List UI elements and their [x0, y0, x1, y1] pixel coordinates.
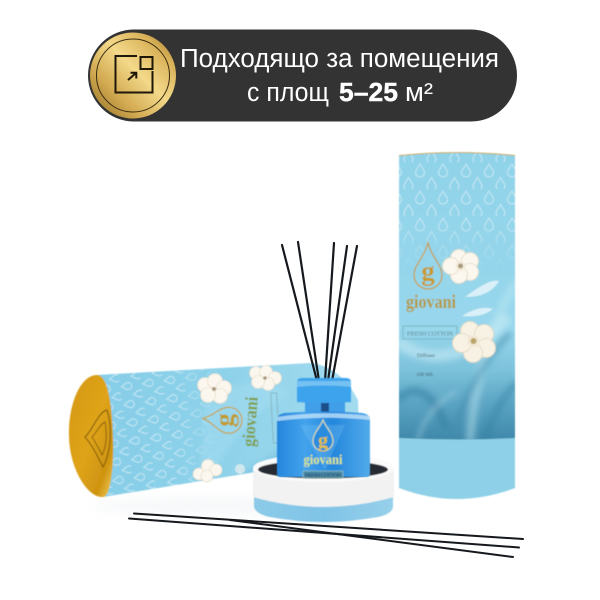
cotton flower bottom — [452, 322, 496, 362]
lid base — [253, 454, 394, 522]
bottle cap — [297, 378, 351, 403]
header badge — [88, 30, 517, 122]
gold medallion icon — [90, 32, 176, 118]
tube label: 100 ML — [416, 372, 435, 378]
bottle — [277, 378, 370, 479]
tube label: FRESH COTTON — [407, 330, 453, 338]
heading text: Подходящо за помещения — [180, 45, 499, 73]
bottle logo: g — [318, 430, 328, 452]
pill background — [88, 30, 517, 122]
tube logo — [406, 243, 456, 313]
tube logo: g — [421, 256, 435, 286]
lid blue band — [254, 492, 393, 522]
bottle label: FRESH COTTON — [305, 473, 341, 479]
bottle collar — [305, 401, 345, 415]
heading text — [180, 45, 499, 107]
tube gold rim — [399, 153, 515, 156]
heading text: 5–25 — [339, 77, 398, 107]
loose reed sticks — [129, 514, 523, 557]
tube label: Diffuser — [417, 352, 435, 359]
lying tube logo: giovani — [238, 396, 262, 447]
bottle logo — [304, 420, 343, 467]
bottle logo: giovani — [304, 452, 343, 467]
lying tube logo: g — [209, 412, 239, 428]
lid inner dark — [258, 460, 388, 478]
tube logo: giovani — [406, 292, 456, 313]
reed sticks in bottle — [282, 242, 357, 381]
heading text: м² — [405, 79, 433, 107]
tube body — [399, 150, 515, 510]
bottle body — [277, 412, 370, 477]
lying tube gold end — [69, 375, 113, 497]
lying tube logo — [201, 394, 262, 447]
lying tube body — [98, 362, 359, 498]
upright tube — [399, 150, 515, 510]
tube label — [403, 326, 457, 378]
cotton flowers on lying tube — [193, 366, 282, 482]
lying tube label — [271, 393, 279, 443]
heading text: с площ — [247, 79, 329, 107]
cotton flower top — [442, 250, 478, 284]
tube lower band — [398, 437, 516, 500]
lid white wall — [253, 468, 394, 507]
lid rim — [253, 454, 394, 482]
lying tube — [68, 362, 359, 498]
soft floor shadow — [90, 498, 350, 514]
feathers — [462, 281, 499, 316]
